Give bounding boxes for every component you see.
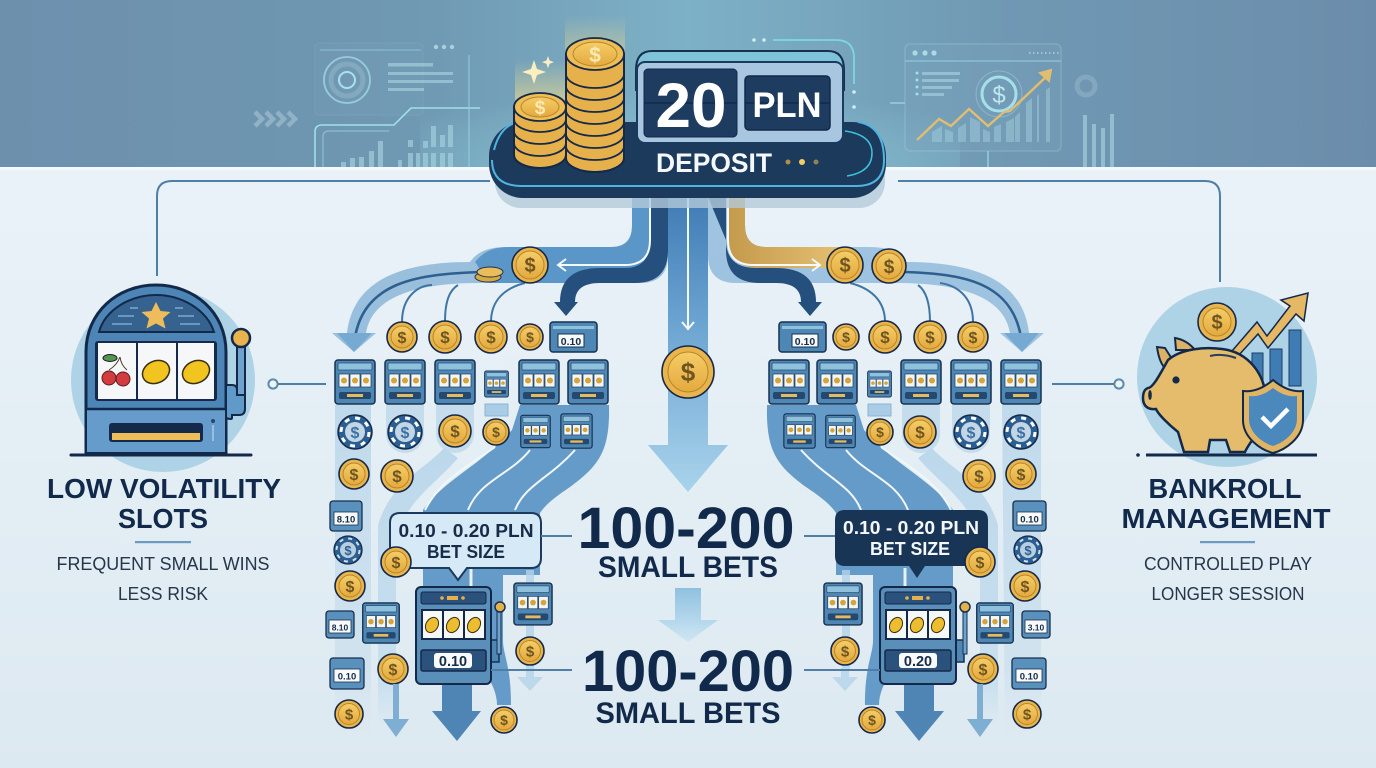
- chips and coins row: left: $: [351, 425, 360, 442]
- flow: right distribution band: [708, 197, 1044, 352]
- coin on light callout: $: [392, 555, 401, 572]
- stat: 100-200 small bets (upper): 100-200: [578, 496, 794, 561]
- icon: piggy bank: $: [1211, 312, 1223, 334]
- center coin: [662, 346, 714, 398]
- currency: PLN: [752, 86, 822, 125]
- gold glow and sparkles: [515, 15, 625, 100]
- text: slots description: LESS RISK: [118, 583, 209, 604]
- bet display: top right: [779, 322, 826, 352]
- right column: mixed small items: 3.10: [1028, 622, 1045, 632]
- coins row: right: $: [880, 328, 890, 347]
- heading: low volatility slots: [47, 473, 281, 534]
- bet value: 0.20: [904, 654, 932, 670]
- left column: mixed small items: $: [344, 543, 352, 558]
- bet value: 0.10: [439, 654, 467, 670]
- lower center arrow: [658, 588, 718, 642]
- connector: deposit to bankroll management: [898, 181, 1220, 282]
- coins row: right: $: [969, 330, 978, 347]
- top coins on the flow: $: [839, 255, 851, 277]
- deposit dock: [489, 122, 886, 198]
- left column: mixed small items: 8.10: [332, 622, 349, 632]
- callout: bet size dark: 0.10 - 0.20 PLN: [843, 517, 979, 538]
- left column: mixed small items: $: [389, 662, 398, 679]
- right column: mixed small items: $: [1021, 579, 1030, 596]
- coin stack: tall: $: [589, 44, 601, 67]
- center arrow: [648, 197, 728, 492]
- coin stack: tall: [566, 38, 624, 172]
- left column: mixed small items: [326, 501, 408, 728]
- left column: mixed small items: 8.10: [337, 514, 355, 526]
- chips and coins row: left: $: [492, 424, 500, 440]
- chips and coins row: right: $: [915, 423, 925, 442]
- coin stack: small: $: [535, 98, 546, 119]
- chips and coins row: left: $: [401, 425, 410, 442]
- arrows under machines: left: [383, 668, 543, 741]
- left column: mixed small items: $: [345, 706, 354, 724]
- callout: bet size light: 0.10 - 0.20 PLN: [398, 520, 534, 541]
- coins row: left: $: [398, 330, 407, 347]
- top coins on the flow: [475, 247, 906, 283]
- callout: bet size dark: BET SIZE: [870, 538, 950, 559]
- side machines near center: $: [841, 644, 850, 660]
- coin lower right: [859, 707, 885, 733]
- callout: bet size light: BET SIZE: [427, 541, 505, 562]
- vertical light streams: [335, 405, 1041, 735]
- connector: deposit to low volatility slots: [157, 181, 490, 276]
- indicator dots: [786, 159, 818, 165]
- coins row: right: [833, 321, 988, 353]
- icon: slot machine: [71, 285, 255, 472]
- chips and coins row: left: [338, 414, 592, 492]
- text: bankroll description: [1144, 553, 1312, 604]
- coin on dark callout: [965, 547, 995, 577]
- right column: mixed small items: [968, 501, 1050, 728]
- heading: bankroll management: BANKROLL: [1148, 473, 1302, 504]
- chips and coins row: right: $: [974, 467, 984, 486]
- flow: right wavy streams to machine: [767, 405, 953, 705]
- callout: bet size light: [390, 513, 541, 580]
- deposit label: DEPOSIT: [656, 148, 772, 178]
- display: 20 PLN: [636, 51, 844, 143]
- slot machine: big right: [880, 587, 970, 684]
- coins row: left: [387, 321, 543, 353]
- chips and coins row: right: [784, 414, 1038, 492]
- side machines near center: [514, 583, 862, 665]
- coin on light callout: [381, 547, 411, 577]
- side machines near center: $: [526, 644, 535, 660]
- callout: bet size dark: [835, 510, 988, 578]
- text: slots description: [56, 553, 270, 604]
- bet display: top left: 0.10: [561, 336, 581, 348]
- heading: bankroll management: [1122, 473, 1330, 534]
- divider: slots: [135, 541, 191, 543]
- arrows under machines: right: [832, 668, 993, 741]
- header band: [0, 0, 1376, 170]
- icon: piggy bank: [1136, 287, 1317, 467]
- stat: 100-200 small bets (lower): 100-200: [582, 639, 794, 704]
- right column: mixed small items: $: [979, 662, 988, 679]
- flow: left distribution band: [332, 197, 668, 352]
- machines row: left: [335, 360, 608, 416]
- right column: mixed small items: 0.10: [1020, 672, 1038, 682]
- teal accent: [752, 38, 856, 109]
- header decoration: right growth chart: $: [992, 82, 1006, 109]
- coins row: left: $: [526, 329, 534, 345]
- heading: low volatility slots: SLOTS: [118, 503, 208, 534]
- header decoration: left dashboard: [255, 43, 480, 167]
- text: slots description: FREQUENT SMALL WINS: [56, 553, 270, 574]
- connector lines to center text: [491, 536, 880, 670]
- amount: 20: [656, 71, 726, 141]
- right column: mixed small items: 0.10: [1020, 514, 1039, 526]
- chips and coins row: left: $: [450, 422, 460, 441]
- left column: mixed small items: $: [346, 579, 355, 596]
- coins row: right: $: [842, 329, 850, 345]
- coin lower right: $: [868, 712, 876, 728]
- chips and coins row: right: $: [876, 424, 884, 440]
- connector node: bankroll: [1052, 379, 1124, 389]
- divider: bankroll: [1200, 541, 1255, 543]
- text: bankroll description: CONTROLLED PLAY: [1144, 553, 1312, 574]
- center coin: $: [681, 357, 696, 387]
- left column: mixed small items: 0.10: [338, 672, 356, 682]
- coin lower left: [491, 707, 517, 733]
- right column: mixed small items: $: [1023, 706, 1032, 724]
- slot machine: big left: [416, 587, 505, 684]
- chips and coins row: left: $: [392, 467, 402, 486]
- chips and coins row: right: $: [967, 425, 976, 442]
- chips and coins row: right: $: [1017, 467, 1026, 484]
- bet display: top right: 0.10: [795, 336, 815, 348]
- coin on dark callout: $: [976, 555, 985, 572]
- machines row: right: [769, 360, 1041, 416]
- coins row: left: $: [440, 328, 450, 347]
- coins row: right: $: [925, 328, 935, 347]
- text: bankroll description: LONGER SESSION: [1152, 583, 1304, 604]
- top coins on the flow: $: [524, 255, 536, 277]
- right column: mixed small items: $: [1024, 543, 1032, 558]
- connector node: slots: [268, 379, 326, 389]
- coins row: left: $: [486, 328, 496, 347]
- flow: left wavy streams to machine: [423, 405, 609, 705]
- stat: 100-200 small bets (upper): SMALL BETS: [598, 551, 778, 584]
- heading: low volatility slots: LOW VOLATILITY: [47, 473, 281, 504]
- bet display: top left: [550, 322, 597, 352]
- deposit dock shadow: [495, 150, 885, 208]
- coin stack: small: [514, 93, 566, 168]
- chips and coins row: left: $: [350, 467, 359, 484]
- header decoration: right growth chart: [890, 44, 1114, 167]
- coin lower left: $: [500, 712, 508, 728]
- stat: 100-200 small bets (lower): SMALL BETS: [596, 697, 780, 730]
- chips and coins row: right: $: [1017, 425, 1026, 442]
- heading: bankroll management: MANAGEMENT: [1122, 503, 1330, 534]
- top coins on the flow: $: [884, 257, 895, 278]
